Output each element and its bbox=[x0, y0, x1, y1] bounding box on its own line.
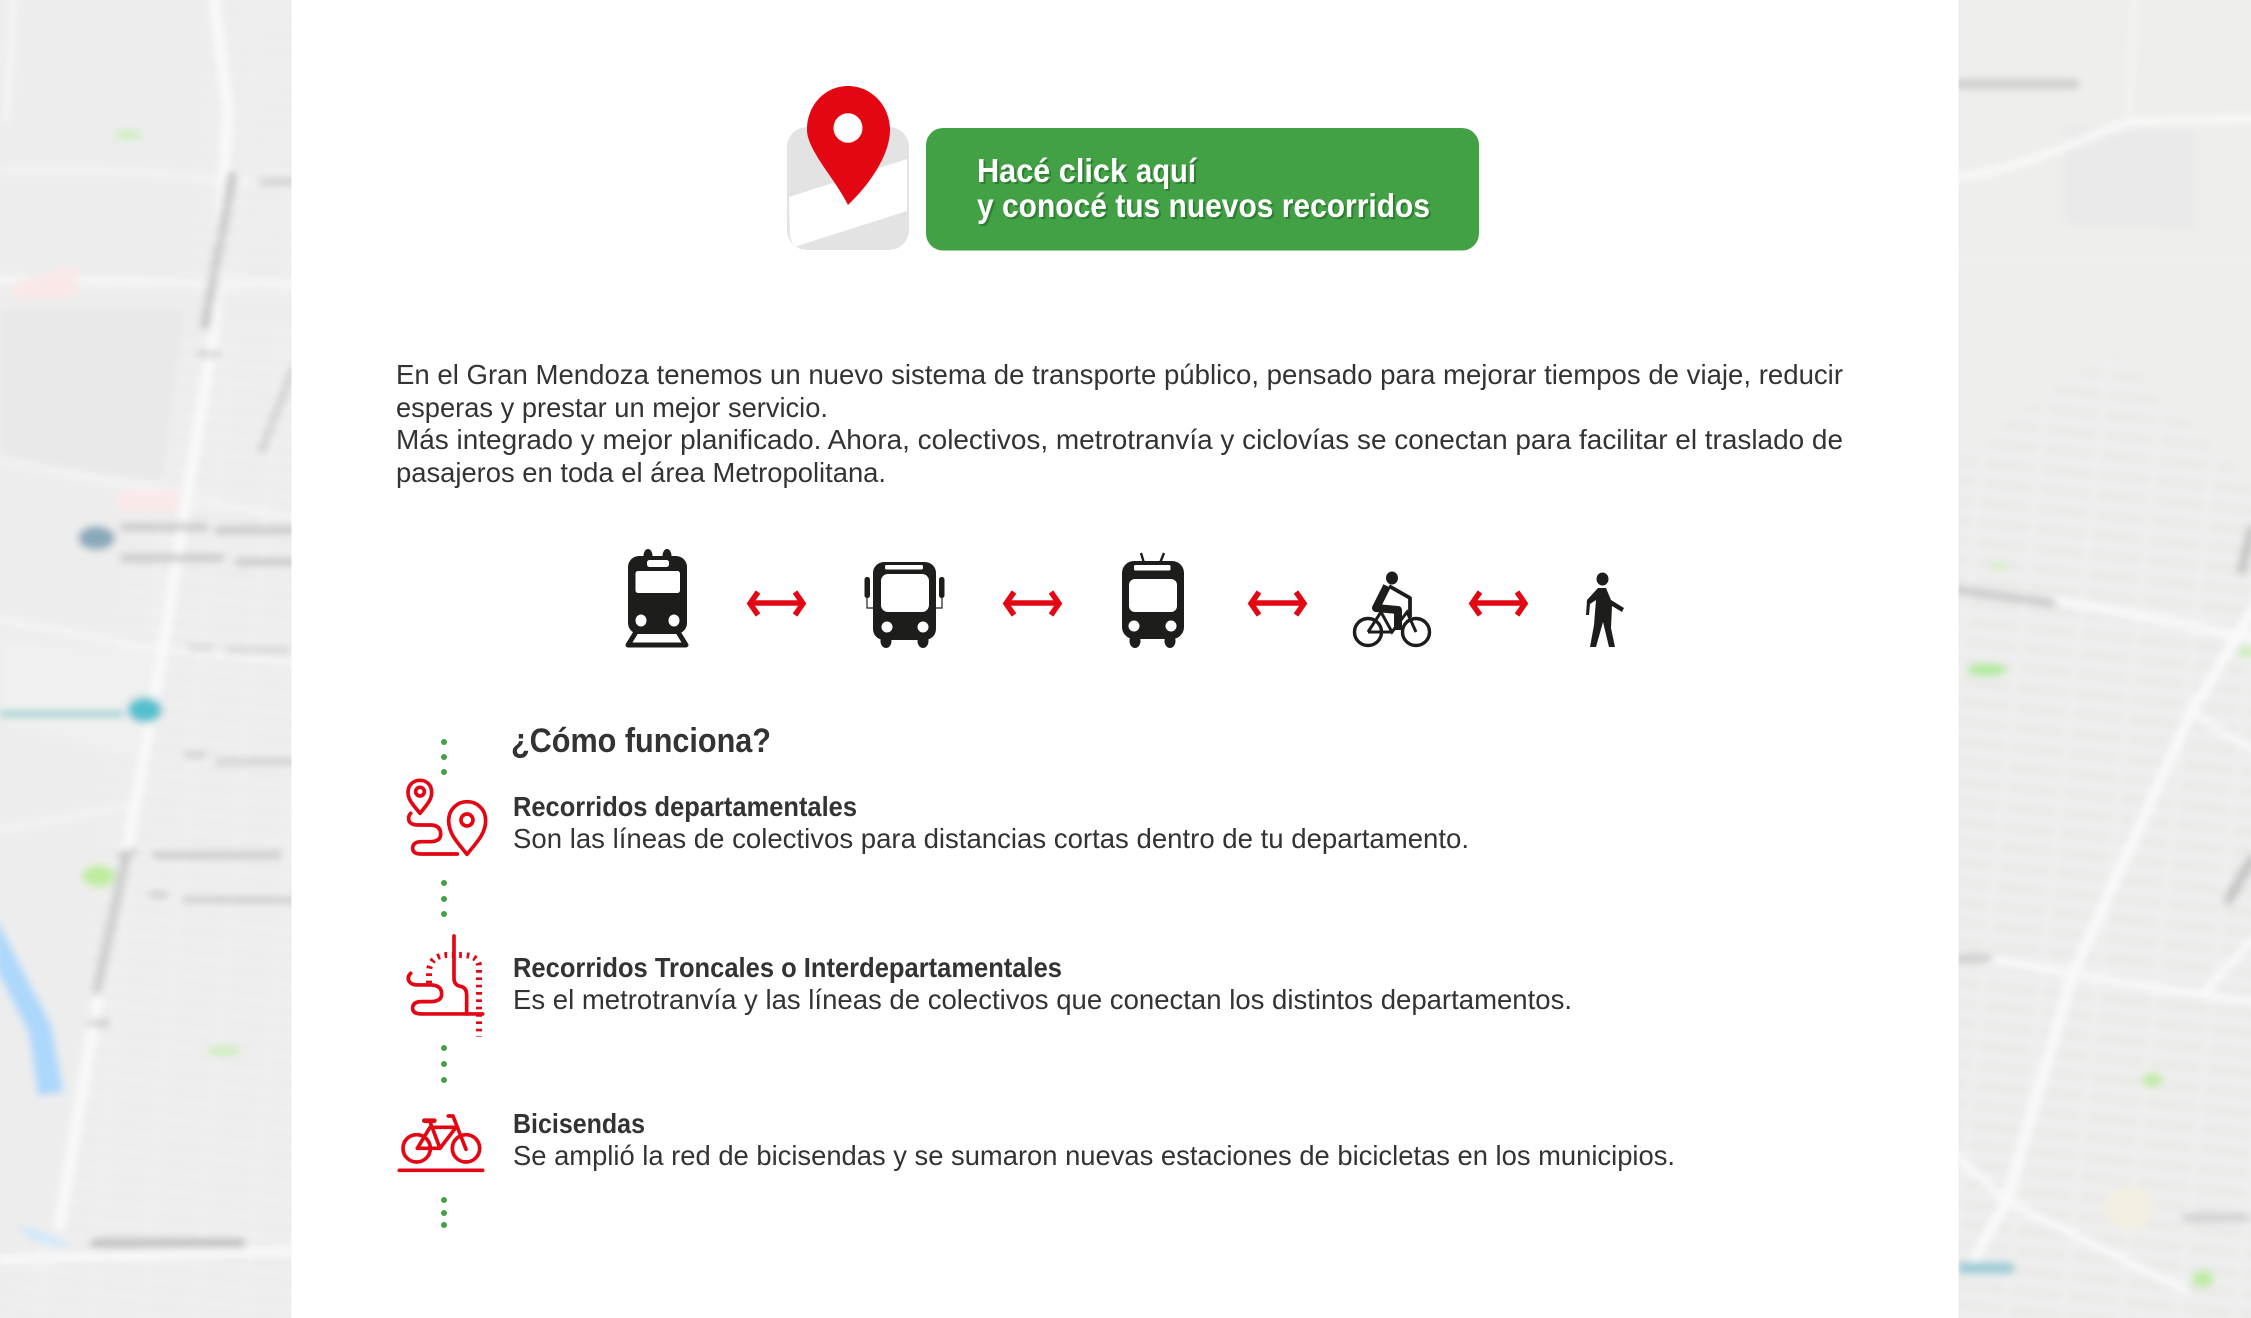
icon: departmental route bbox=[408, 780, 486, 854]
arrow: bicycle to pedestrian bbox=[1472, 592, 1525, 615]
background: blurred map, right bbox=[1950, 0, 2251, 1318]
text block: recorridos troncales: Recorridos Troncales o Interdepartamentales bbox=[513, 952, 1062, 983]
text block: bicisendas bbox=[513, 1108, 1675, 1171]
button: recorridos call to action: aquí bbox=[1136, 152, 1198, 189]
icon: map with location pin bbox=[787, 86, 909, 250]
text block: bicisendas: Bicisendas bbox=[513, 1108, 645, 1139]
dotted connector: bottom bbox=[441, 1197, 447, 1228]
dotted connector: second bbox=[441, 880, 447, 917]
text block: recorridos troncales bbox=[513, 952, 1572, 1015]
text block: introduction: Más integrado y mejor planificado. Ahora, colectivos, metrotranvía y ciclovías se conectan para facilitar el traslado de bbox=[396, 424, 1843, 455]
arrow: trolley to bicycle bbox=[1251, 592, 1304, 615]
icon: train bbox=[628, 549, 687, 645]
text block: introduction: esperas y prestar un mejor servicio. bbox=[396, 392, 828, 423]
arrow: train to bus bbox=[750, 592, 803, 615]
icon: bus bbox=[864, 562, 944, 648]
text block: introduction: pasajeros en toda el área Metropolitana. bbox=[396, 457, 886, 488]
icon: cyclist bbox=[1354, 572, 1430, 646]
button: recorridos call to action: y conocé tus nuevos recorridos bbox=[977, 187, 1430, 224]
text block: recorridos departamentales: Son las líneas de colectivos para distancias cortas dentro de tu departamento. bbox=[513, 823, 1469, 854]
dotted connector: top bbox=[441, 739, 447, 775]
icon: trolleybus bbox=[1122, 553, 1184, 648]
button: recorridos call to action bbox=[926, 128, 1479, 250]
text block: recorridos troncales: Es el metrotranvía y las líneas de colectivos que conectan los distintos departamentos. bbox=[513, 984, 1572, 1015]
heading: como funciona: ¿Cómo funciona? bbox=[511, 722, 771, 760]
text block: recorridos departamentales bbox=[513, 791, 1469, 854]
text block: bicisendas: Se amplió la red de bicisendas y se sumaron nuevas estaciones de bicicletas en los municipios. bbox=[513, 1140, 1675, 1171]
icon: pedestrian bbox=[1586, 572, 1624, 647]
icon: trunk routes bbox=[408, 936, 483, 1037]
icon: bicycle lane bbox=[399, 1116, 483, 1170]
text block: introduction bbox=[396, 359, 1843, 488]
button: recorridos call to action: aquí bbox=[1138, 154, 1200, 191]
text block: introduction: En el Gran Mendoza tenemos un nuevo sistema de transporte público, pensado para mejorar tiempos de viaje, reducir bbox=[396, 359, 1843, 390]
background: blurred map, left bbox=[0, 0, 308, 1318]
dotted connector: third bbox=[441, 1045, 447, 1083]
arrow: bus to trolley bbox=[1006, 592, 1059, 615]
button: recorridos call to action: y conocé tus nuevos recorridos bbox=[979, 189, 1432, 226]
text block: recorridos departamentales: Recorridos departamentales bbox=[513, 791, 857, 822]
panel: central white column bbox=[292, 0, 1958, 1318]
button: recorridos call to action: Hacé click bbox=[977, 152, 1128, 189]
button: recorridos call to action: Hacé click bbox=[979, 154, 1130, 191]
